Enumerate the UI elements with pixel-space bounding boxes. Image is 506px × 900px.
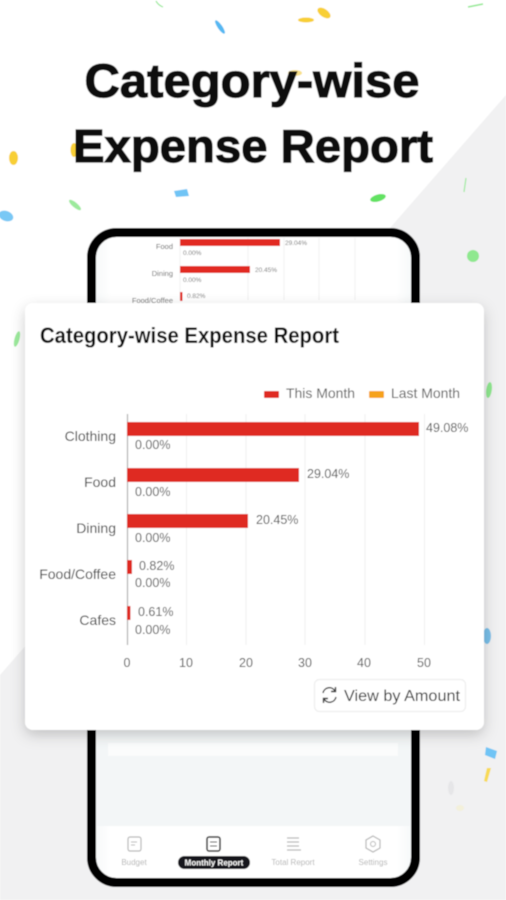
x axis: 20 [239,656,253,670]
value labels: 29.04% [307,467,349,481]
x axis: 0 [124,656,131,670]
button: view by amount [314,680,466,712]
value labels: 0.00% [135,485,170,499]
title: Category-wise [84,54,420,107]
x axis [124,656,431,670]
nav: settings [359,836,387,867]
bar chart [39,414,468,670]
card heading: Category-wise Expense Report [40,323,340,348]
phone mini chart: Food [156,242,173,251]
nav: settings: Settings [359,858,387,867]
category labels: Cafes [79,612,116,628]
value labels: 0.00% [135,438,170,452]
value labels [135,421,468,637]
category labels: Food [84,474,116,490]
category labels: Clothing [65,428,116,444]
x axis: 40 [357,656,371,670]
category labels [39,428,116,628]
value labels: 0.82% [139,559,174,573]
phone mini chart: 0.82% [187,293,206,300]
title [73,54,433,172]
category labels: Dining [76,520,116,536]
legend: Last Month [391,385,460,401]
x axis: 30 [298,656,312,670]
phone mini chart: Food/Coffee [132,296,173,305]
phone mini chart [132,238,355,305]
phone lower screen panel [97,728,410,826]
value labels: 0.00% [135,531,170,545]
phone mini chart: 29.04% [285,240,307,247]
nav: monthly report active: Monthly Report [185,858,244,868]
icon: refresh [323,687,336,703]
phone mini chart: 20.45% [255,267,277,274]
value labels: 0.00% [135,623,170,637]
nav: total report [271,838,315,867]
nav: monthly report active [178,837,250,869]
phone frame [92,232,416,882]
value labels: 49.08% [426,421,468,435]
x axis: 50 [417,656,431,670]
phone mini chart: 0.00% [183,277,202,284]
nav: total report: Total Report [271,858,315,867]
value labels: 0.61% [138,605,173,619]
x axis: 10 [179,656,193,670]
legend: This Month [286,385,355,401]
nav: budget [121,837,147,867]
nav: budget: Budget [121,858,147,867]
panel: expense report card [25,303,484,730]
category labels: Food/Coffee [39,566,116,582]
value labels: 0.00% [135,576,170,590]
phone mini chart: Dining [152,269,173,278]
button: view by amount: View by Amount [344,688,461,705]
value labels: 20.45% [256,513,298,527]
title: Expense Report [73,120,433,172]
bars [127,422,419,620]
legend [264,385,460,401]
phone mini chart: 0.00% [183,250,202,257]
bottom navigation [121,836,387,869]
